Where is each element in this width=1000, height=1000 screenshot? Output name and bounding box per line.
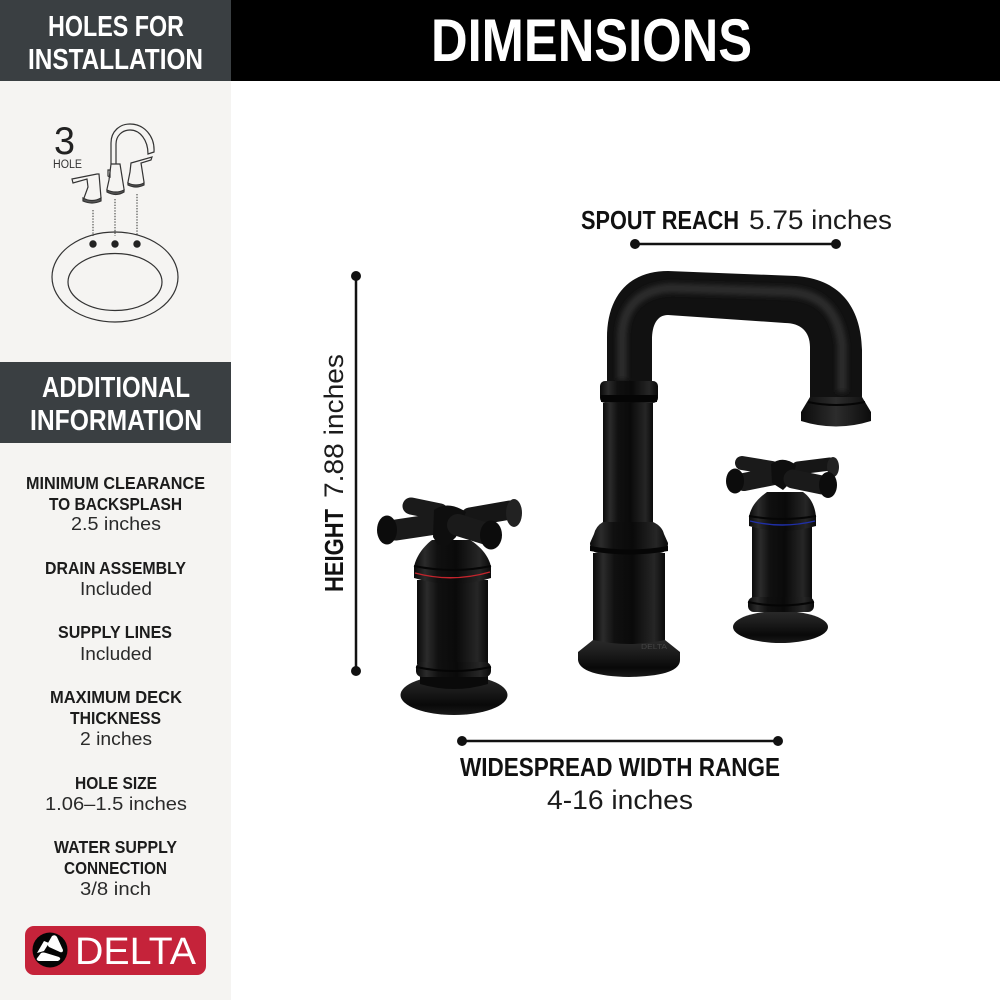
heading: additional information: INFORMATION bbox=[30, 405, 202, 437]
faucet: right cross handle (cold) bbox=[726, 457, 839, 643]
text block: minimum clearance: 2.5 inches bbox=[71, 514, 161, 534]
text block: drain assembly: Included bbox=[80, 579, 152, 599]
icon: three hole faucet and sink diagram: 3 bbox=[54, 120, 75, 163]
title: dimensions bbox=[231, 0, 1000, 81]
heading: additional information: ADDITIONAL bbox=[42, 372, 190, 404]
dimension: height: HEIGHT bbox=[319, 509, 349, 592]
dimension: widespread width range: 4-16 inches bbox=[547, 785, 693, 815]
logo: delta: DELTA bbox=[75, 931, 197, 973]
text block: maximum deck thickness: 2 inches bbox=[80, 729, 152, 749]
icon: three hole faucet and sink diagram: HOLE bbox=[53, 159, 82, 171]
heading: holes for installation bbox=[0, 0, 231, 81]
title: dimensions: DIMENSIONS bbox=[431, 7, 752, 74]
text block: maximum deck thickness bbox=[50, 687, 182, 749]
logo: delta bbox=[25, 926, 206, 975]
text block: minimum clearance: MINIMUM CLEARANCE bbox=[26, 473, 205, 493]
text block: hole size bbox=[45, 773, 187, 814]
text block: minimum clearance bbox=[26, 473, 205, 534]
faucet: left cross handle (hot) bbox=[377, 499, 522, 715]
icon: three hole faucet and sink diagram bbox=[52, 120, 178, 322]
dimension: widespread width range bbox=[457, 736, 783, 815]
faucet: center spout: DELTA bbox=[641, 644, 667, 651]
text block: supply lines: Included bbox=[80, 644, 152, 664]
dimension: spout reach: 5.75 inches bbox=[749, 205, 892, 235]
text block: drain assembly: DRAIN ASSEMBLY bbox=[45, 558, 186, 578]
heading: holes for installation: HOLES FOR bbox=[48, 11, 184, 43]
dimension: widespread width range: WIDESPREAD WIDTH RANGE bbox=[460, 752, 780, 782]
text block: maximum deck thickness: MAXIMUM DECK bbox=[50, 687, 182, 707]
dimension: spout reach bbox=[581, 205, 892, 249]
text block: supply lines bbox=[58, 622, 172, 664]
text block: water supply connection: CONNECTION bbox=[64, 858, 167, 878]
text block: supply lines: SUPPLY LINES bbox=[58, 622, 172, 642]
dimension: spout reach: SPOUT REACH bbox=[581, 205, 739, 235]
text block: water supply connection: WATER SUPPLY bbox=[54, 837, 177, 857]
text block: hole size: HOLE SIZE bbox=[75, 773, 157, 793]
dimension: height: 7.88 inches bbox=[319, 354, 349, 498]
text block: maximum deck thickness: THICKNESS bbox=[70, 708, 161, 728]
faucet: center spout bbox=[578, 271, 871, 677]
panel: left sidebar bbox=[0, 81, 231, 1000]
text block: water supply connection bbox=[54, 837, 177, 899]
heading: additional information bbox=[0, 362, 231, 443]
dimension: height bbox=[319, 271, 361, 676]
text block: hole size: 1.06–1.5 inches bbox=[45, 794, 187, 814]
heading: holes for installation: INSTALLATION bbox=[28, 44, 203, 76]
text block: minimum clearance: TO BACKSPLASH bbox=[49, 494, 182, 514]
text block: drain assembly bbox=[45, 558, 186, 599]
text block: water supply connection: 3/8 inch bbox=[80, 879, 151, 899]
